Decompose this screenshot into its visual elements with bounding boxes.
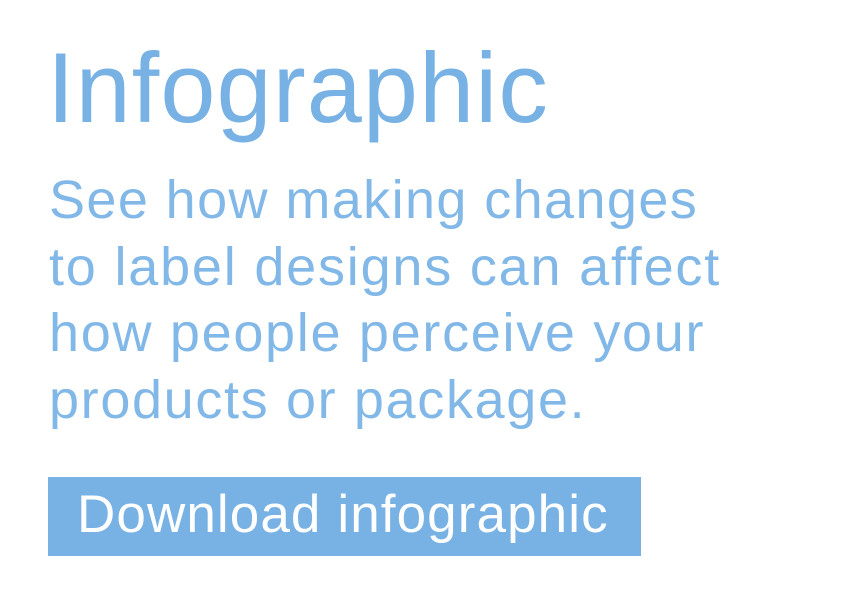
description text (49, 170, 721, 430)
title: Infographic (47, 32, 549, 143)
description text: how people perceive your (49, 303, 705, 363)
description text: See how making changes (49, 170, 698, 230)
description text: to label designs can affect (49, 236, 721, 296)
description text: products or package. (49, 370, 586, 430)
download button (48, 477, 641, 556)
download button: Download infographic (77, 485, 609, 544)
